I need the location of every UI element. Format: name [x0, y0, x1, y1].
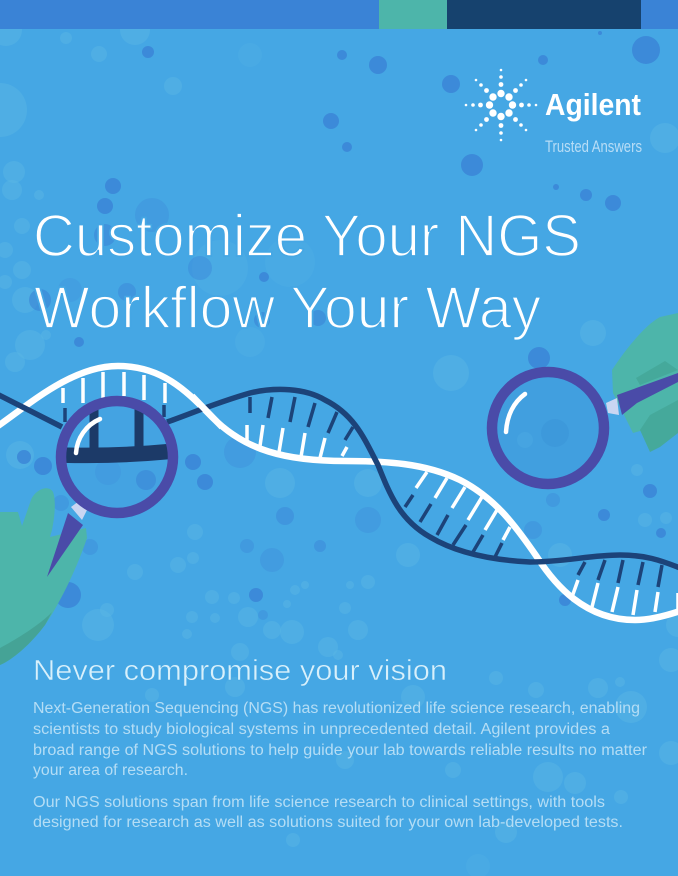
- Agilent logo: [465, 69, 642, 156]
- left magnifier handle: [47, 513, 83, 577]
- DNA double helix: [0, 366, 678, 620]
- enlarged DNA in lens: [60, 405, 175, 455]
- left glove shadow: [0, 612, 52, 665]
- logo tagline: Trusted Answers: [545, 137, 642, 156]
- background bubbles: dark: [17, 31, 666, 620]
- right magnifier lens: [492, 372, 604, 484]
- DNA white strand: [0, 366, 678, 620]
- icon: Agilent spark: [465, 69, 537, 141]
- right magnifier handle: [617, 373, 678, 415]
- right hand with magnifier: [492, 313, 678, 484]
- body paragraph two: designed for research as well as solutions suited for your own lab-developed tests.: [33, 814, 623, 831]
- title: Customize Your NGS: [33, 203, 581, 269]
- title: Workflow Your Way: [34, 275, 541, 341]
- title: [33, 203, 581, 341]
- left hand with magnifier: [0, 401, 175, 665]
- body paragraph one: broad range of NGS solutions to help guide your lab towards reliable results no matter: [33, 742, 647, 759]
- body paragraph one: your area of research.: [33, 762, 188, 779]
- top colour bar: [0, 0, 678, 29]
- body paragraph two: [33, 794, 623, 831]
- right magnifier ferrule: [606, 398, 619, 415]
- DNA navy strand: [0, 389, 678, 568]
- body paragraph one: [33, 700, 647, 779]
- subheading: Never compromise your vision: [33, 655, 447, 687]
- DNA white strand crossing: [192, 396, 222, 427]
- DNA navy rungs: [65, 397, 662, 587]
- right glove shadow: [636, 361, 678, 452]
- left magnifier lens: [60, 401, 175, 513]
- body paragraph one: Next-Generation Sequencing (NGS) has revolutionized life science research, enabling: [33, 700, 640, 717]
- right glove: [612, 313, 678, 433]
- body paragraph two: Our NGS solutions span from life science research to clinical settings, with tools: [33, 794, 605, 811]
- left magnifier ferrule: [71, 501, 87, 520]
- DNA white rungs: [63, 372, 678, 615]
- left glove: [0, 488, 87, 665]
- body paragraph one: scientists to study biological systems in unprecedented detail. Agilent provides a: [33, 721, 610, 738]
- logo wordmark: Agilent: [545, 87, 641, 122]
